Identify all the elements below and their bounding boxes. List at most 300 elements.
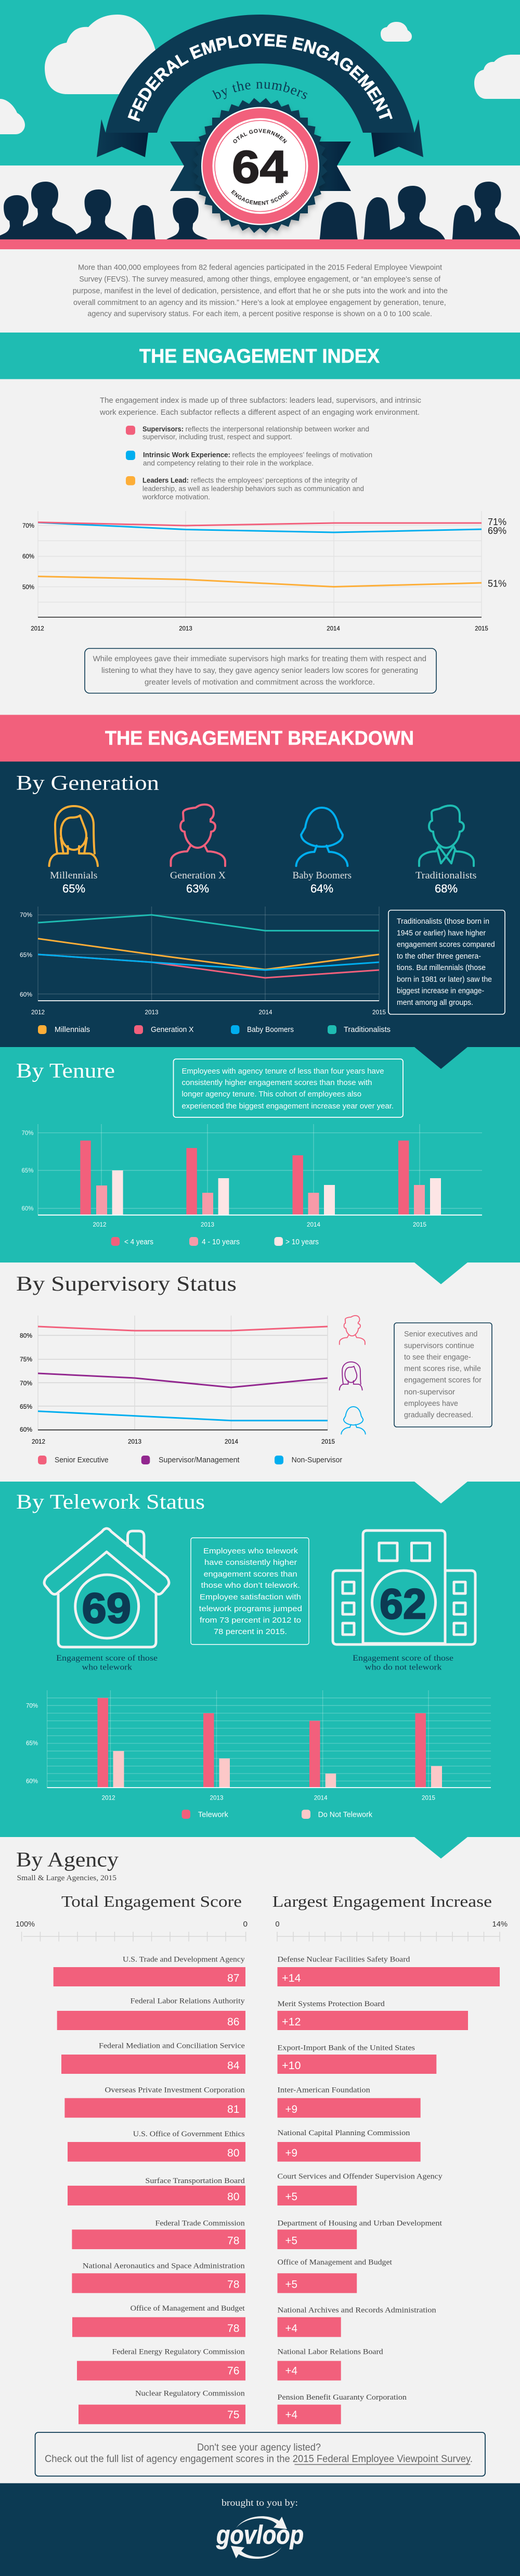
cloud: right edge [474, 55, 520, 99]
series: supervisors [38, 522, 482, 526]
row: Surface Transportation Board: Surface Transportation Board [145, 2177, 245, 2185]
person 5 [166, 198, 208, 239]
series: intrinsic work experience [38, 522, 482, 532]
scale ruler: largest increase [277, 1932, 500, 1942]
row: Office of Management and Budget: +5 [285, 2278, 297, 2291]
cloud: small right [381, 22, 412, 42]
icon: non-supervisor [341, 1407, 366, 1434]
row: U.S. Office of Government Ethics: U.S. Office of Government Ethics [133, 2130, 245, 2138]
bar chart: telework [26, 1690, 491, 1802]
series: supervisor/management [38, 1373, 328, 1387]
legend: leaders lead [126, 476, 364, 501]
row: Inter-American Foundation: +9 [285, 2103, 297, 2115]
bars 2013 [203, 1713, 230, 1788]
arrow: from generation [414, 1047, 467, 1069]
white rim [201, 107, 319, 225]
row: National Archives and Records Administration: National Archives and Records Administration [278, 2306, 436, 2315]
x axis labels: 2012 [31, 1009, 45, 1016]
row: Pension Benefit Guaranty Corporation: +4 [285, 2409, 297, 2421]
legend: telework: Do Not Telework [318, 1810, 372, 1819]
scale ruler: total score [22, 1932, 246, 1942]
values: generations: 68% [435, 882, 458, 895]
row: National Capital Planning Commission: National Capital Planning Commission [278, 2129, 410, 2137]
row: Court Services and Offender Supervision Agency: +5 [285, 2191, 297, 2203]
callout: traditionalists: biggest increase in engage- [397, 987, 484, 995]
callout: full list [35, 2432, 485, 2476]
series: traditionalists [38, 915, 379, 930]
callout: traditionalists: to the other three genera- [397, 952, 481, 961]
row: Federal Labor Relations Authority [57, 1997, 245, 2030]
subheading: Small & Large Agencies, 2015 [17, 1874, 116, 1882]
row: Export-Import Bank of the United States: Export-Import Bank of the United States [278, 2044, 415, 2052]
y axis labels: 60% [22, 1205, 34, 1212]
seal starburst [192, 98, 328, 233]
series: generation x [38, 954, 379, 978]
cloud: left edge [0, 99, 25, 134]
person 2 [23, 182, 76, 239]
series: millennials [38, 939, 379, 970]
legend: tenure: > 10 years [285, 1238, 319, 1246]
callout: supervisors vs leaders [85, 648, 436, 693]
x axis labels: 2015 [475, 624, 488, 632]
legend: supervisory status [38, 1456, 342, 1464]
row: National Capital Planning Commission: +9 [285, 2147, 297, 2159]
heading: THE ENGAGEMENT INDEX [139, 346, 380, 367]
bar chart: largest engagement increase [278, 1956, 500, 2424]
legend: supervisors: reflects the interpersonal relationship between worker and [185, 425, 369, 433]
callout: traditionalists: tions. But millennials (those [397, 963, 486, 972]
callout: tenure [174, 1059, 403, 1117]
callout: traditionalists: ment among all groups. [397, 998, 473, 1007]
row: National Capital Planning Commission [278, 2129, 421, 2162]
series: baby boomers [38, 954, 379, 970]
legend: leaders lead: leadership, as well as leadership behaviors such as communication and [142, 485, 364, 492]
row: Federal Labor Relations Authority: 86 [227, 2016, 239, 2028]
panel: hero header [0, 0, 520, 249]
y axis labels: 65% [20, 951, 32, 959]
icon: supervisor [340, 1362, 362, 1390]
legend: telework: Telework [198, 1810, 228, 1819]
bars 2015 [398, 1141, 441, 1215]
labels: generations: Millennials [50, 870, 98, 881]
legend: tenure [111, 1237, 319, 1246]
callout: traditionalists: 1945 or earlier) have higher [397, 928, 486, 938]
pink stripe [0, 239, 520, 249]
x axis labels: 2015 [372, 1009, 386, 1016]
callout: traditionalists [388, 910, 505, 1014]
callout: supervisors: to see their engage- [404, 1353, 471, 1361]
arrow: from supervisory [414, 1482, 467, 1503]
row: Federal Trade Commission: Federal Trade Commission [155, 2219, 245, 2227]
callout: traditionalists: engagement scores compared [397, 940, 495, 949]
caption: telework score: Engagement score of those [56, 1654, 158, 1663]
x axis labels: 2014 [327, 624, 340, 632]
row: Department of Housing and Urban Development: +5 [285, 2235, 297, 2247]
intro text: purpose, manifest in the level of dedication, persistence, and effort that he or she puts into the work and into the [73, 286, 448, 296]
row: Nuclear Regulatory Commission: 75 [227, 2409, 239, 2421]
y axis labels [22, 1129, 34, 1212]
legend: supervisory status: Supervisor/Management [159, 1456, 240, 1464]
row: National Labor Relations Board: +4 [285, 2365, 297, 2377]
row: National Aeronautics and Space Administration: 78 [227, 2278, 239, 2291]
y axis labels: 60% [20, 1426, 32, 1433]
logo top arrow [236, 2516, 287, 2529]
x axis labels: 2014 [225, 1438, 238, 1445]
row: U.S. Office of Government Ethics: 80 [227, 2147, 239, 2159]
legend: generations: Traditionalists [344, 1025, 391, 1034]
end values: 69% [488, 526, 506, 536]
labels: generations: Baby Boomers [292, 870, 352, 881]
x axis labels [93, 1221, 426, 1228]
row: U.S. Trade and Development Agency [54, 1956, 245, 1986]
row: National Archives and Records Administration: +4 [285, 2323, 297, 2335]
legend: supervisors: supervisor, including trust, respect and support. [142, 433, 292, 441]
row: Merit Systems Protection Board: +12 [282, 2016, 301, 2028]
bar chart: tenure [22, 1124, 482, 1228]
row: Federal Energy Regulatory Commission [77, 2348, 245, 2380]
y axis labels: 60% [20, 991, 32, 998]
right tail [371, 119, 423, 157]
bars 2012 [98, 1698, 124, 1788]
icon: generation x man [171, 805, 225, 866]
legend: generations: Baby Boomers [247, 1025, 294, 1034]
heading: By Telework Status [16, 1490, 205, 1513]
legend: intrinsic work experience: and competency relating to their role in the workplace. [143, 459, 314, 467]
legend: intrinsic work experience [126, 451, 372, 467]
legend: supervisors [126, 425, 369, 441]
icon: millennial woman [49, 806, 98, 866]
legend: supervisors: Supervisors: [142, 425, 184, 433]
row: Inter-American Foundation [278, 2086, 421, 2118]
line chart: generations [20, 907, 386, 1016]
callout: traditionalists: born in 1981 or later) saw the [397, 975, 492, 984]
person 6 [319, 202, 358, 239]
icon: baby boomer [296, 808, 347, 866]
row: National Labor Relations Board: National Labor Relations Board [278, 2348, 383, 2356]
panel: breakdown heading [0, 715, 520, 762]
row: Federal Labor Relations Authority: Federal Labor Relations Authority [131, 1997, 245, 2006]
callout: supervisors vs leaders: listening to what they have to say, they gave agency senior leaders low scores for generating [101, 666, 418, 675]
callout: telework: those who don’t telework. [201, 1581, 300, 1590]
row: Federal Mediation and Conciliation Service: Federal Mediation and Conciliation Service [99, 2042, 245, 2050]
row: Office of Management and Budget [278, 2259, 393, 2293]
row: Export-Import Bank of the United States [278, 2044, 436, 2074]
line chart: engagement index [22, 511, 506, 632]
index intro text: The engagement index is made up of three subfactors: leaders lead, supervisors, and intrinsic [100, 396, 421, 405]
callout: supervisors [394, 1323, 492, 1427]
scale labels: 0 [275, 1920, 280, 1929]
callout: full list: Don't see your agency listed? [197, 2442, 321, 2453]
scale labels: 100% [16, 1920, 35, 1929]
row: National Aeronautics and Space Administration: National Aeronautics and Space Administration [83, 2262, 245, 2270]
row: Federal Mediation and Conciliation Service: 84 [227, 2060, 240, 2072]
row: Export-Import Bank of the United States: +10 [282, 2060, 301, 2072]
row: National Archives and Records Administration [278, 2306, 436, 2337]
row: Surface Transportation Board [68, 2177, 245, 2205]
person 3 [76, 189, 127, 239]
left tail [97, 119, 148, 157]
row: Office of Management and Budget: Office of Management and Budget [131, 2304, 245, 2313]
x axis labels: 2012 [93, 1221, 107, 1228]
column heading: total score: Total Engagement Score [61, 1892, 242, 1910]
intro text: Survey (FEVS). The survey measured, among other things, employee engagement, or “an employee’s sense of [79, 275, 441, 284]
row: National Aeronautics and Space Administration [72, 2262, 245, 2293]
row: Court Services and Offender Supervision Agency [278, 2172, 443, 2205]
values: generations: 64% [310, 882, 333, 895]
person 8 [390, 186, 445, 239]
row: Defense Nuclear Facilities Safety Board: Defense Nuclear Facilities Safety Board [278, 1956, 410, 1964]
callout: supervisors vs leaders: greater levels of motivation and commitment across the workforce. [145, 678, 375, 687]
legend: intrinsic work experience: reflects the employees’ feelings of motivation [232, 451, 372, 459]
x axis labels [102, 1794, 435, 1802]
callout: tenure: experienced the biggest engagement increase year over year. [182, 1102, 394, 1111]
legend: supervisory status: Senior Executive [55, 1456, 109, 1464]
y axis labels: 65% [20, 1403, 32, 1410]
x axis labels [32, 1438, 335, 1445]
caption: non-telework score: Engagement score of those [353, 1654, 453, 1663]
y axis labels: 70% [22, 522, 34, 529]
row: Federal Trade Commission [72, 2219, 245, 2249]
callout: supervisors: non-supervisor [404, 1387, 455, 1397]
logo wordmark: govloop [216, 2520, 304, 2549]
intro text: agency and supervisory status. For each item, a percent positive response is shown on a 0 to 100 scale. [87, 309, 432, 318]
row: Department of Housing and Urban Development [278, 2219, 443, 2249]
labels: generations: Generation X [170, 870, 226, 881]
legend: intrinsic work experience: Intrinsic Work Experience: [143, 451, 230, 459]
legend: leaders lead: reflects the employees’ perceptions of the integrity of [191, 477, 357, 484]
y axis labels: 70% [26, 1702, 38, 1709]
values: generations [62, 882, 458, 895]
y axis labels: 70% [20, 1380, 32, 1387]
seal number: 64 [232, 141, 288, 193]
arrow: from telework [414, 1837, 467, 1858]
caption: non-telework score [353, 1654, 453, 1672]
row: Court Services and Offender Supervision Agency: Court Services and Offender Supervision Agency [278, 2172, 443, 2180]
index intro text: work experience. Each subfactor reflects a different aspect of an engaging work environment. [99, 408, 420, 417]
y axis labels: 70% [22, 1129, 34, 1137]
person 1 [0, 195, 29, 239]
title: FEDERAL EMPLOYEE ENGAGEMENT [128, 33, 393, 122]
thin pink ring [215, 121, 306, 211]
legend: generations [38, 1025, 391, 1034]
y axis labels [20, 1332, 32, 1433]
panel: by supervisory status [16, 1263, 492, 1464]
panel: by telework status [0, 1482, 520, 1837]
row: Inter-American Foundation: Inter-American Foundation [278, 2086, 370, 2094]
callout: supervisors: gradually decreased. [404, 1410, 473, 1420]
y axis labels: 60% [26, 1778, 38, 1785]
bar chart: total engagement score [54, 1956, 245, 2424]
intro text: More than 400,000 employees from 82 federal agencies participated in the 2015 Federal Employee Viewpoint [78, 263, 443, 272]
caption: telework score [56, 1654, 158, 1672]
y axis labels: 50% [22, 583, 34, 591]
end values [488, 517, 506, 589]
row: National Labor Relations Board [278, 2348, 383, 2380]
callout: tenure: Employees with agency tenure of less than four years have [182, 1067, 384, 1076]
caption: non-telework score: who do not telework [365, 1663, 442, 1672]
series: senior executive [38, 1327, 328, 1331]
x axis labels: 2012 [32, 1438, 45, 1445]
y axis labels: 80% [20, 1332, 32, 1340]
x axis labels: 2013 [128, 1438, 141, 1445]
end values: 51% [488, 579, 506, 589]
legend: tenure: < 4 years [124, 1238, 153, 1246]
x axis labels [31, 1009, 386, 1016]
y axis labels: 65% [26, 1739, 38, 1746]
x axis labels: 2014 [307, 1221, 320, 1228]
end values: 71% [488, 517, 506, 527]
row: U.S. Trade and Development Agency: 87 [227, 1972, 239, 1984]
y axis labels [20, 911, 32, 998]
callout: telework: have consistently higher [204, 1558, 297, 1567]
row: Department of Housing and Urban Development: Department of Housing and Urban Development [278, 2219, 443, 2227]
intro text [73, 263, 448, 318]
callout: tenure: longer agency tenure. This cohort of employees also [182, 1090, 361, 1099]
pink ring [203, 108, 318, 224]
icon: traditionalist [419, 806, 474, 866]
sky background [0, 0, 520, 165]
icon: house score: 69 [82, 1585, 131, 1632]
callout: telework: engagement scores than [204, 1570, 297, 1579]
row: Defense Nuclear Facilities Safety Board: +14 [282, 1972, 301, 1984]
series: non-supervisor [38, 1411, 328, 1421]
heading: By Agency [16, 1847, 119, 1871]
row: Merit Systems Protection Board: Merit Systems Protection Board [278, 2000, 385, 2008]
labels: generations: Traditionalists [415, 870, 476, 881]
callout: telework: Employees who telework [203, 1547, 298, 1555]
callout: telework: 78 percent in 2015. [214, 1627, 287, 1636]
bars 2012 [80, 1141, 123, 1215]
person 9 [452, 205, 475, 239]
x axis labels: 2012 [31, 624, 44, 632]
series: leaders lead [38, 577, 482, 587]
callout: supervisors: ment scores rise, while [404, 1364, 481, 1373]
x axis labels [31, 624, 488, 632]
row: Federal Energy Regulatory Commission: Federal Energy Regulatory Commission [112, 2348, 245, 2356]
callout: supervisors: Senior executives and [404, 1330, 477, 1338]
heading: By Tenure [16, 1059, 115, 1082]
row: Federal Mediation and Conciliation Service [61, 2042, 245, 2074]
index intro text [99, 396, 421, 417]
x axis labels: 2012 [102, 1794, 115, 1802]
right ribbon piece [312, 142, 351, 191]
x axis labels: 2013 [210, 1794, 224, 1802]
row: Pension Benefit Guaranty Corporation [278, 2393, 407, 2424]
labels: generations [50, 870, 476, 881]
panel: by tenure [0, 1047, 520, 1263]
bars 2015 [415, 1713, 442, 1788]
callout: supervisors: engagement scores for [404, 1376, 482, 1384]
callout: telework: telework programs jumped [199, 1604, 302, 1613]
row: U.S. Office of Government Ethics [68, 2130, 245, 2162]
row: Office of Management and Budget: Office of Management and Budget [278, 2259, 393, 2267]
legend: generations: Generation X [151, 1025, 193, 1034]
y axis labels: 75% [20, 1356, 32, 1363]
row: Office of Management and Budget [72, 2304, 245, 2337]
icon: office building score: 62 [380, 1580, 426, 1628]
person 4 [131, 205, 155, 239]
seal: score badge [193, 98, 327, 237]
ribbon tails of arch [97, 119, 423, 157]
legend: generations: Millennials [55, 1025, 90, 1034]
x axis labels: 2015 [413, 1221, 426, 1228]
legend: supervisory status: Non-Supervisor [292, 1456, 342, 1464]
arch ribbon [106, 15, 414, 133]
legend: tenure: 4 - 10 years [202, 1238, 240, 1246]
white centre [212, 118, 308, 214]
legend: leaders lead: workforce motivation. [142, 493, 210, 501]
y axis labels [22, 522, 34, 591]
row: U.S. Trade and Development Agency: U.S. Trade and Development Agency [123, 1956, 245, 1964]
logo: govloop [216, 2516, 304, 2559]
callout: telework [191, 1538, 309, 1644]
row: Defense Nuclear Facilities Safety Board [278, 1956, 500, 1986]
clouds [0, 15, 520, 134]
caption: telework score: who telework [82, 1663, 132, 1672]
bars 2014 [292, 1155, 335, 1215]
row: Overseas Private Investment Corporation: 81 [227, 2103, 239, 2115]
values: generations: 63% [186, 882, 209, 895]
legend: leaders lead: Leaders Lead: [142, 477, 189, 484]
panel: by generation [0, 761, 520, 1047]
callout: supervisors: employees have [404, 1399, 458, 1408]
arrow: from tenure [414, 1263, 467, 1284]
panel: engagement index [0, 333, 520, 693]
seal ribbon [170, 142, 351, 191]
panel: footer [0, 2483, 520, 2576]
heading: THE ENGAGEMENT BREAKDOWN [105, 728, 414, 749]
footer text: brought to you by: [222, 2497, 298, 2508]
scale labels: 14% [492, 1920, 508, 1929]
row: Merit Systems Protection Board [278, 2000, 468, 2030]
legend: telework [182, 1810, 372, 1819]
icon: office building score [333, 1531, 475, 1644]
person 7 [363, 197, 390, 239]
heading: By Generation [16, 771, 159, 795]
callout: full list: Check out the full list of agency engagement scores in the 2015 Federal Employee Viewpoint Survey. [45, 2454, 473, 2465]
row: Federal Energy Regulatory Commission: 76 [227, 2365, 239, 2377]
logo bottom arrow [231, 2546, 282, 2559]
y axis labels [26, 1702, 38, 1785]
row: Federal Trade Commission: 78 [227, 2235, 239, 2247]
heading: By Supervisory Status [16, 1272, 237, 1295]
y axis labels: 70% [20, 911, 32, 919]
row: Pension Benefit Guaranty Corporation: Pension Benefit Guaranty Corporation [278, 2393, 407, 2402]
values: generations: 65% [62, 882, 85, 895]
callout: telework: Employee satisfaction with [200, 1592, 301, 1602]
index band [0, 333, 520, 379]
row: Office of Management and Budget: 78 [227, 2323, 239, 2335]
left ribbon piece [170, 142, 208, 191]
icon: house score [44, 1528, 169, 1647]
y axis labels: 65% [22, 1167, 34, 1174]
x axis labels: 2014 [314, 1794, 328, 1802]
x axis labels: 2015 [321, 1438, 335, 1445]
line chart: supervisory status [20, 1316, 335, 1445]
row: Nuclear Regulatory Commission [79, 2390, 245, 2424]
bars 2013 [186, 1148, 229, 1215]
y axis labels: 60% [22, 553, 34, 560]
scale labels [16, 1920, 508, 1929]
x axis labels: 2013 [201, 1221, 214, 1228]
callout: traditionalists: Traditionalists (those born in [397, 917, 489, 926]
subtitle: by the numbers: by the numbers [212, 81, 308, 99]
row: Overseas Private Investment Corporation: Overseas Private Investment Corporation [105, 2086, 245, 2094]
person 10 [474, 182, 520, 239]
cloud: large left [45, 15, 162, 94]
icon: senior executive [340, 1316, 365, 1344]
column heading: largest increase: Largest Engagement Increase [272, 1892, 492, 1910]
